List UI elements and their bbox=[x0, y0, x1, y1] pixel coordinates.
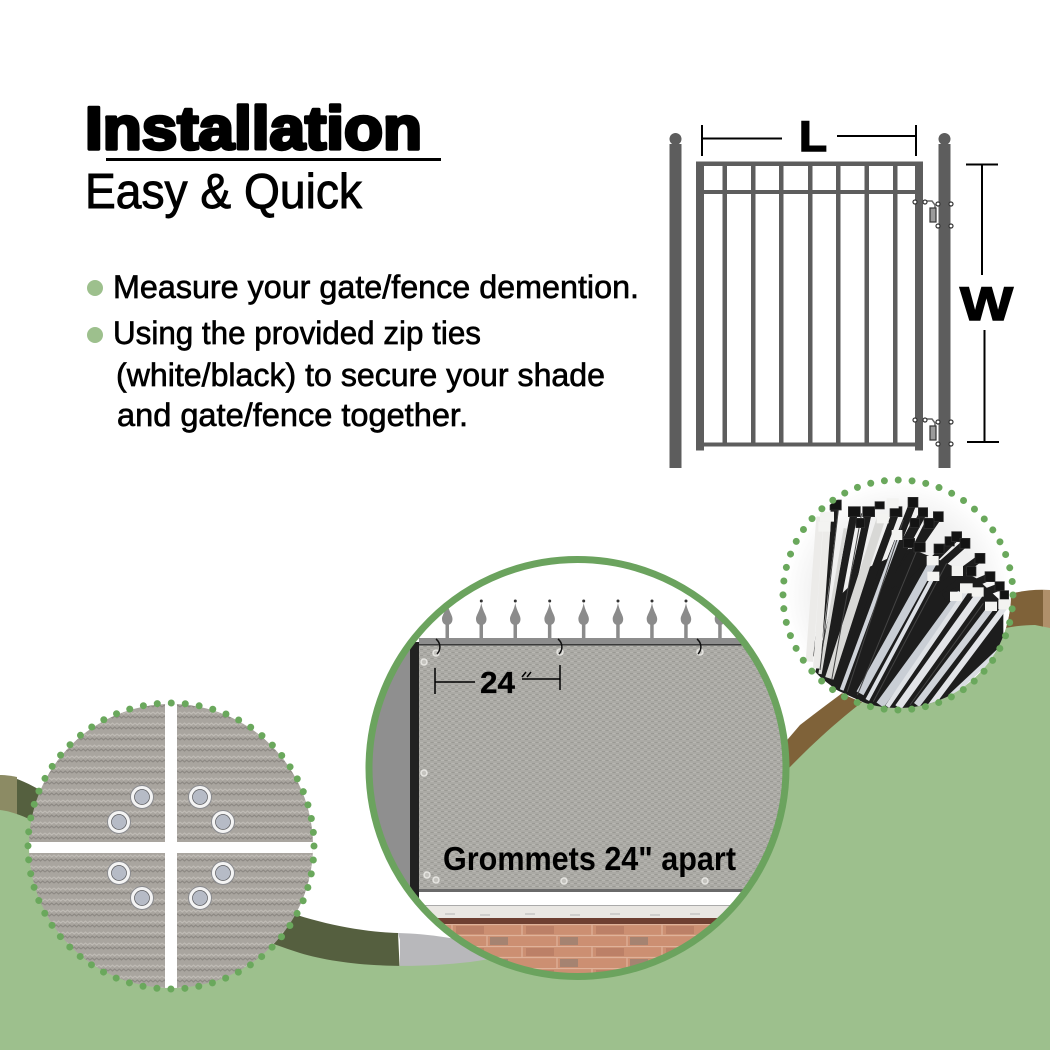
title: Installation: Installation bbox=[85, 95, 422, 162]
concrete ledge bbox=[425, 905, 730, 918]
black tie heads bbox=[830, 497, 1009, 599]
length dimension L bbox=[702, 113, 916, 161]
right post bbox=[938, 133, 950, 468]
lower hinge bbox=[913, 418, 953, 446]
step 2 text: (white/black) to secure your shade bbox=[116, 357, 605, 393]
gate diagram bbox=[670, 113, 1014, 468]
bullet 2 bbox=[87, 327, 103, 343]
zip ties bundle bbox=[804, 497, 1011, 708]
zip tie hooks bbox=[436, 639, 701, 654]
title underline bbox=[106, 158, 441, 161]
upright black ties bbox=[813, 506, 999, 656]
white right ties bbox=[898, 593, 1005, 707]
instruction list bbox=[87, 269, 639, 433]
caption: Grommets 24 inches apart: Grommets 24" apart bbox=[443, 840, 736, 877]
eyelets top right bbox=[188, 786, 234, 834]
dark bundle mass bbox=[815, 548, 1003, 710]
grommets bbox=[421, 649, 708, 884]
spear finials bbox=[442, 600, 725, 638]
black post bbox=[410, 642, 419, 904]
upper hinge bbox=[913, 200, 953, 228]
zip ties circle bbox=[783, 480, 1013, 710]
photo circle: grommets 24 inches apart bbox=[360, 550, 800, 994]
width dimension W: W bbox=[960, 277, 1014, 330]
left post bbox=[670, 133, 682, 468]
top rail bbox=[419, 638, 742, 646]
background hills bbox=[0, 590, 1050, 1050]
step 1 text: Measure your gate/fence demention. bbox=[113, 269, 639, 305]
step 2 text bbox=[113, 315, 605, 433]
width dimension W bbox=[960, 164, 1014, 442]
mesh close-up circle bbox=[25, 700, 317, 992]
white tie heads bbox=[818, 498, 1011, 611]
step 2 text: and gate/fence together. bbox=[117, 397, 468, 433]
light left ties bbox=[809, 517, 827, 668]
dotted green edge bbox=[28, 703, 314, 989]
mesh swatch bbox=[25, 700, 317, 992]
bullet 1 bbox=[87, 280, 103, 296]
24 inch dimension: 24 bbox=[480, 665, 516, 700]
gate frame and pickets bbox=[696, 162, 923, 450]
brick wall bbox=[438, 918, 718, 973]
light mid-left ties bbox=[820, 517, 898, 690]
silver middle ties bbox=[860, 562, 968, 707]
step 2 text: Using the provided zip ties bbox=[113, 315, 481, 351]
eyelets bottom left bbox=[108, 862, 154, 910]
eyelets bottom right bbox=[188, 862, 234, 910]
bottom rail bbox=[419, 889, 743, 892]
subtitle: Easy & Quick: Easy & Quick bbox=[85, 165, 362, 219]
dotted green border bbox=[783, 480, 1013, 710]
green ring bbox=[369, 560, 786, 976]
shade fabric bbox=[419, 646, 799, 890]
side wall post bbox=[372, 650, 410, 886]
eyelets top left bbox=[108, 786, 154, 834]
24 inch dimension bbox=[435, 665, 560, 700]
length dimension L: L bbox=[799, 113, 827, 161]
rib highlights on black ties bbox=[820, 510, 983, 705]
